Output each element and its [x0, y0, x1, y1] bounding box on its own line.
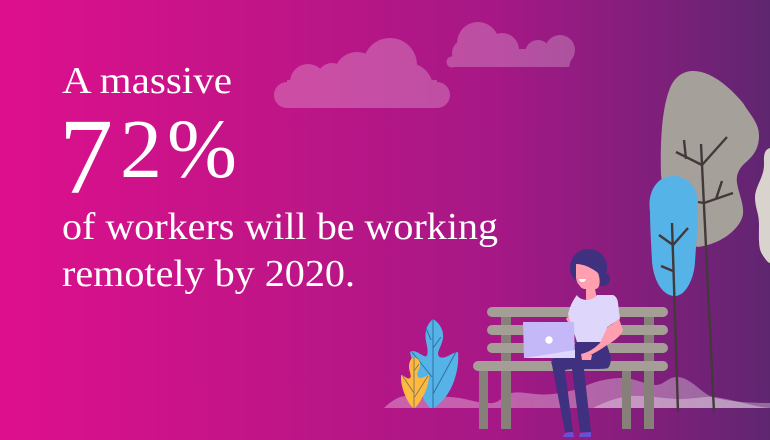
laptop [523, 322, 575, 358]
smile [579, 279, 586, 282]
bench slats [473, 307, 668, 371]
trunk and branches: blue tree [659, 223, 688, 412]
tree: grey [661, 71, 759, 412]
hair bun [596, 272, 610, 286]
laptop logo [545, 336, 553, 344]
big number: 72%: 7 [59, 98, 113, 217]
laptop highlight [525, 350, 575, 358]
heading: A massive: A massive [62, 60, 232, 102]
bench [473, 307, 668, 429]
bench legs and posts [479, 315, 654, 429]
big number: 72%: % [167, 103, 237, 196]
plant: blue and yellow leaves [401, 319, 458, 408]
trunk and branches: grey tree [676, 137, 733, 412]
hills [384, 377, 770, 408]
neck and face [576, 264, 600, 302]
hair [570, 249, 607, 286]
shoes [563, 432, 591, 437]
shirt [568, 295, 620, 342]
woman with laptop [523, 249, 623, 437]
rear arm [566, 312, 576, 325]
tree: blue [649, 176, 698, 412]
text: remotely by 2020.: remotely by 2020. [62, 253, 355, 295]
cloud: right [446, 22, 575, 68]
legs [551, 342, 611, 432]
tree: far right white [755, 148, 770, 263]
hand [581, 354, 592, 360]
big number: 72%: 2 [120, 103, 162, 196]
front arm [581, 319, 623, 356]
text: of workers will be working: of workers will be working [62, 206, 498, 248]
cloud: left [274, 38, 450, 113]
